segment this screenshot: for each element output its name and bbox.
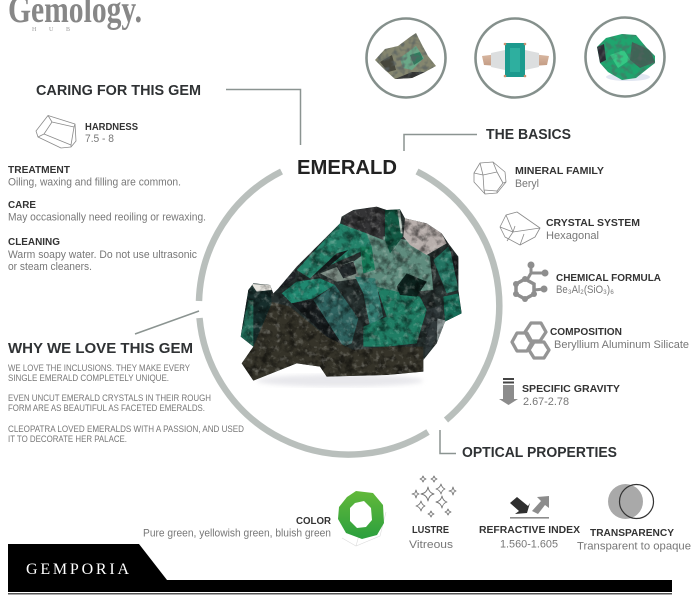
connector: basics to emerald <box>404 134 477 151</box>
heading: caring for this gem: CARING FOR THIS GEM <box>36 83 201 99</box>
text block: why we love <box>8 363 244 444</box>
title: emerald: EMERALD <box>297 157 397 179</box>
item: composition: Beryllium Aluminum Silicate <box>554 339 689 351</box>
text block: why we love: IT TO DECORATE HER PALACE. <box>8 434 127 444</box>
item: treatment: TREATMENT <box>8 165 70 176</box>
icon: mineral family <box>474 162 506 194</box>
item: hardness: 7.5 - 8 <box>85 133 114 145</box>
item: chemical formula <box>556 273 661 296</box>
item: crystal system: CRYSTAL SYSTEM <box>546 218 640 229</box>
item: specific gravity: 2.67-2.78 <box>523 396 569 408</box>
item: color: Pure green, yellowish green, bluish green <box>143 528 331 540</box>
icon: hardness crystal <box>36 116 76 148</box>
specimen circle: green crystal cluster <box>586 18 664 96</box>
item: refractive index: 1.560-1.605 <box>500 538 558 550</box>
item: color <box>143 516 332 540</box>
logo: Gemology Hub: H U B <box>32 27 70 33</box>
icon: color ring <box>338 491 386 546</box>
footer banner <box>8 544 672 594</box>
item: composition <box>550 327 689 351</box>
item: mineral family: Beryl <box>515 178 539 190</box>
item: treatment <box>8 165 181 188</box>
item: refractive index: REFRACTIVE INDEX <box>479 525 580 536</box>
connector: optical properties <box>440 430 456 454</box>
item: chemical formula: CHEMICAL FORMULA <box>556 273 661 284</box>
footer banner: GEMPORIA <box>26 561 129 578</box>
text block: why we love: EVEN UNCUT EMERALD CRYSTALS IN THEIR ROUGH <box>8 393 211 403</box>
item: care: CARE <box>8 200 36 211</box>
item: chemical formula: Be₃Al₂(SiO₃)₆ <box>556 284 614 296</box>
text block: why we love: SINGLE EMERALD COMPLETELY UNIQUE. <box>8 373 169 383</box>
item: composition: COMPOSITION <box>550 327 622 338</box>
item: treatment: Oiling, waxing and filling are common. <box>8 176 181 188</box>
item: lustre <box>409 525 454 551</box>
item: hardness: HARDNESS <box>85 122 138 133</box>
item: cleaning: Warm soapy water. Do not use ultrasonic <box>8 249 197 261</box>
main emerald rock <box>237 203 467 387</box>
item: cleaning: CLEANING <box>8 237 60 248</box>
icon: transparency circles <box>608 484 654 519</box>
item: transparency <box>577 528 691 552</box>
item: transparency: Transparent to opaque <box>577 540 691 552</box>
item: specific gravity <box>522 384 620 408</box>
item: refractive index <box>479 525 580 550</box>
icon: crystal system <box>500 212 540 245</box>
item: crystal system: Hexagonal <box>546 230 599 242</box>
text block: why we love: CLEOPATRA LOVED EMERALDS WITH A PASSION, AND USED <box>8 424 244 434</box>
item: care <box>8 200 206 224</box>
item: transparency: TRANSPARENCY <box>590 528 674 539</box>
icon: composition honeycomb <box>512 323 549 358</box>
ring around main gem <box>199 172 499 455</box>
icon: lustre sparkles <box>412 476 456 517</box>
text block: why we love: FORM ARE AS BEAUTIFUL AS FACETED EMERALDS. <box>8 403 205 413</box>
icon: refractive index arrows <box>510 496 549 519</box>
specimen circle: rough emerald <box>366 18 446 98</box>
icon: specific gravity arrow <box>499 378 518 405</box>
item: cleaning <box>8 237 197 273</box>
specimen circle: emerald ring <box>476 18 554 98</box>
item: hardness <box>85 122 138 145</box>
item: cleaning: or steam cleaners. <box>8 261 92 273</box>
heading: optical properties: OPTICAL PROPERTIES <box>462 445 617 461</box>
heading: why we love this gem: WHY WE LOVE THIS GEM <box>8 341 193 357</box>
heading: the basics: THE BASICS <box>486 127 571 143</box>
item: lustre: LUSTRE <box>412 525 449 536</box>
connector: caring to emerald <box>226 90 300 145</box>
text block: why we love: WE LOVE THE INCLUSIONS. THEY MAKE EVERY <box>8 363 190 373</box>
item: care: May occasionally need reoiling or rewaxing. <box>8 212 206 224</box>
item: mineral family <box>515 166 604 190</box>
connector: why we love to ring <box>135 311 199 334</box>
item: lustre: Vitreous <box>409 539 454 551</box>
item: color: COLOR <box>296 516 332 527</box>
icon: chemical formula molecule <box>513 262 548 302</box>
item: crystal system <box>546 218 640 242</box>
item: specific gravity: SPECIFIC GRAVITY <box>522 384 620 395</box>
item: mineral family: MINERAL FAMILY <box>515 166 604 177</box>
